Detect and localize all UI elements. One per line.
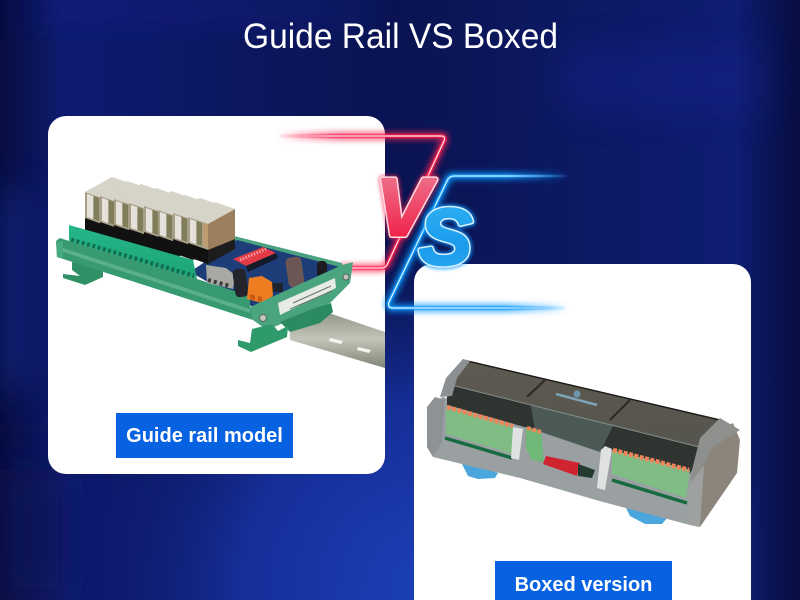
capacitors bbox=[232, 256, 327, 298]
left foot bbox=[63, 262, 103, 285]
label: boxed version: Boxed version bbox=[515, 574, 652, 596]
label: guide rail model bbox=[116, 413, 293, 458]
product photo: guide rail relay module bbox=[56, 177, 385, 368]
title: Guide Rail VS Boxed bbox=[243, 17, 558, 56]
interior behind cover bbox=[447, 383, 703, 474]
neon vs badge bbox=[278, 136, 567, 308]
green terminal block bbox=[69, 225, 197, 279]
orange connector bbox=[247, 276, 273, 303]
base front rail bbox=[56, 238, 253, 320]
grey terminal bbox=[206, 265, 235, 289]
left terminal block bbox=[445, 407, 513, 458]
red dip switch bbox=[543, 456, 595, 478]
cover logo mark bbox=[556, 390, 597, 405]
right foot clips bbox=[280, 303, 333, 332]
blue din clips bbox=[462, 464, 498, 479]
red dip switch bbox=[233, 247, 278, 272]
letter S: S bbox=[419, 192, 472, 281]
letter S: S bbox=[419, 192, 472, 281]
relays row bbox=[85, 177, 235, 264]
card: guide rail model bbox=[48, 116, 385, 474]
letter S: S bbox=[419, 192, 472, 281]
label: boxed version bbox=[495, 561, 672, 600]
lower grey housing bbox=[427, 397, 692, 525]
right side housing bbox=[690, 423, 740, 527]
label: guide rail model: Guide rail model bbox=[126, 425, 283, 447]
red neon frame bbox=[278, 136, 445, 268]
grey corner caps bbox=[440, 359, 470, 397]
centre terminal bbox=[526, 427, 544, 462]
pcb bbox=[190, 240, 340, 307]
panel: guide rail model bbox=[56, 177, 385, 458]
right terminal block bbox=[612, 450, 690, 503]
smoked cover top bbox=[447, 360, 720, 447]
right end plate bbox=[250, 262, 353, 330]
product photo: boxed module bbox=[427, 359, 740, 527]
letter V: V bbox=[376, 163, 436, 253]
blue neon frame bbox=[388, 176, 567, 308]
card: boxed version bbox=[414, 264, 751, 600]
letter V: V bbox=[376, 163, 436, 253]
white label bbox=[278, 278, 336, 315]
back rail bbox=[234, 236, 342, 269]
din rail bbox=[290, 310, 385, 368]
panel: boxed version bbox=[427, 359, 740, 600]
letter V: V bbox=[376, 163, 436, 253]
white clips bbox=[511, 427, 523, 460]
